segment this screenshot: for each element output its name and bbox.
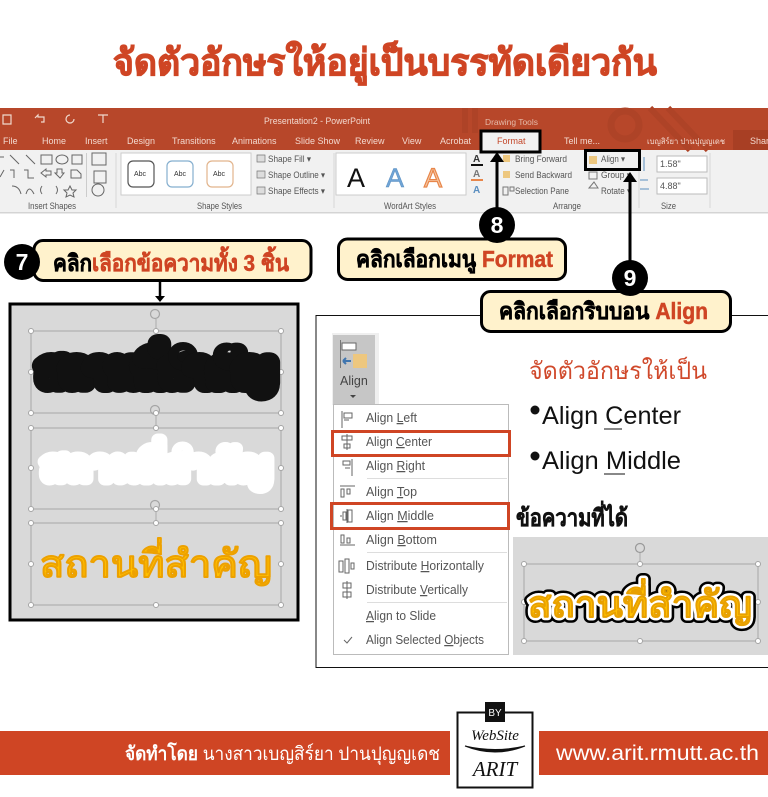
ribbon tabs: View [402,136,422,146]
result image [513,537,768,655]
ribbon tabs: Insert [85,136,108,146]
callout: step 8: คลิกเลือกเมนู Format [356,246,553,274]
text fill buttons: A [473,154,480,165]
arrow: step 7 to panel [155,281,165,302]
ribbon tabs: Animations [232,136,277,146]
menu item labels: Align Center [366,435,432,449]
menu item labels: Align Bottom [366,533,437,547]
shape styles gallery: Abc [213,171,226,178]
align dropdown menu [332,404,510,654]
contextual tab label: Drawing Tools [485,117,538,127]
panel: powerpoint ribbon [0,108,768,214]
logo: website arit [458,702,532,788]
footer: website bar [539,731,768,775]
logo: website arit: BY [488,708,502,719]
quick access icons [3,115,108,124]
bullet: align middle: Align Middle [542,447,681,475]
footer: website bar: www.arit.rmutt.ac.th [555,742,759,765]
logo: website arit: ARIT [471,757,518,781]
wordart gallery: A [347,163,365,193]
black outlined text: สถานที่สำคัญ [40,344,272,392]
wordart gallery: A [424,163,442,193]
callout: step 9: คลิกเลือกริบบอน Align [499,298,708,324]
arrange commands: Group ▾ [601,170,631,180]
size inputs: 4.88" [660,181,681,191]
ribbon tabs: Slide Show [295,136,341,146]
arrange commands: Send Backward [515,170,572,180]
result wordart text: สถานที่สำคัญ [528,578,752,626]
align button: Align [340,374,368,388]
shape commands: Shape Fill ▾ [268,154,311,164]
arrange commands: Align ▾ [601,154,625,164]
footer: credit bar: จัดทำโดย นางสาวเบญสิร์ยา ปานปุญญเดช [125,742,440,766]
wordart gallery: WordArt Styles [384,201,436,211]
callout: step 9 [482,260,730,332]
menu item labels: Align Top [366,485,417,499]
size inputs [640,156,707,194]
ribbon tabs: Home [42,136,66,146]
panel: three text layers [10,304,298,620]
arrow: step 8 to format tab [490,152,504,240]
shape commands [197,154,325,211]
result wordart text: สถานที่สำคัญ [528,578,752,626]
arrange commands: Arrange [553,201,581,211]
align button [332,333,379,405]
menu item labels: Align to Slide [366,609,436,623]
menu item labels: Align Middle [366,509,434,523]
footer: credit bar [0,731,450,775]
shape commands: Shape Outline ▾ [268,170,325,180]
insert shapes gallery [0,153,106,197]
ribbon tabs: Design [127,136,155,146]
menu item icons [339,411,355,643]
format tab [482,131,540,151]
highlight: align center [332,432,510,456]
text fill buttons: A [473,169,480,180]
ribbon tabs: File [3,136,18,146]
arrange commands: Rotate ▾ [601,186,631,196]
panel: powerpoint ribbon: Format [497,136,526,146]
shape commands: Shape Styles [197,201,242,211]
size inputs: 1.58" [660,159,681,169]
ribbon tabs: Transitions [172,136,216,146]
white outlined text: สถานที่สำคัญ [42,440,270,488]
arrange commands [515,154,676,211]
ribbon tabs: Review [355,136,385,146]
ribbon tabs: Tell me... [564,136,600,146]
selection frames [28,310,284,608]
shape styles gallery [121,153,251,195]
insert shapes label: Insert Shapes [28,201,76,211]
shape styles gallery: Abc [134,171,147,178]
shape styles gallery: Abc [174,171,187,178]
menu item labels [366,411,485,647]
shape commands: Shape Effects ▾ [268,186,325,196]
menu item labels: Distribute Horizontally [366,559,485,573]
ribbon tabs: Acrobat [440,136,472,146]
callout: step 7 [4,240,311,280]
result wordart text: สถานที่สำคัญ [528,578,752,626]
arrow: step 9 to align [623,172,637,270]
arrange commands: Size [661,201,676,211]
text fill buttons [471,154,483,196]
menu item labels: Align Right [366,459,426,473]
menu item labels: Align Left [366,411,418,425]
arrange commands: Bring Forward [515,154,567,164]
callout: step 8: 8 [491,212,504,238]
instruction heading: จัดตัวอักษรให้เป็น [529,356,707,385]
callout: step 9: 9 [624,265,636,291]
highlight: format tab [481,131,540,152]
logo: website arit: WebSite [471,728,519,744]
title: จัดตัวอักษรให้อยู่เป็นบรรทัดเดียวกัน [113,39,657,86]
ribbon tabs [3,136,768,146]
menu item labels: Align Selected Objects [366,633,484,647]
highlight: align middle [332,504,508,528]
wordart gallery: A [386,163,404,193]
ribbon tabs: เบญสิร์ยา ปานปุญญเดช [647,136,726,146]
callout: step 7: คลิกเลือกข้อความทั้ง 3 ชิ้น [53,246,289,276]
bullet: align center: Align Center [542,402,681,430]
callout: step 8 [338,207,566,280]
result heading: ข้อความที่ได้ [516,500,628,532]
arrange commands: Selection Pane [515,186,569,196]
wordart gallery [336,153,466,211]
orange text: สถานที่สำคัญ [40,538,272,586]
callout: step 7: 7 [16,249,28,275]
highlight: align button [586,150,640,170]
ribbon title text: Presentation2 - PowerPoint [264,116,370,126]
text fill buttons: A [473,185,480,196]
panel: result preview and menu [316,316,768,668]
menu item labels: Distribute Vertically [366,583,469,597]
